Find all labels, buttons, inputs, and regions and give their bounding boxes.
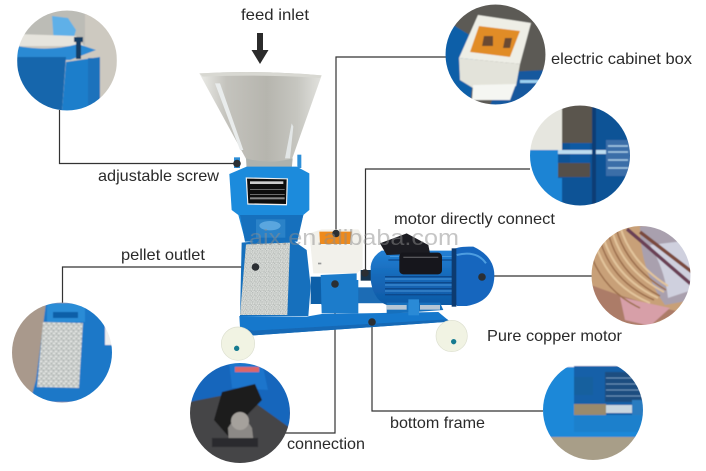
label: adjustable screw: adjustable screw <box>98 168 220 185</box>
detail circle: connection <box>189 362 291 464</box>
detail circle: pure copper <box>591 225 692 330</box>
leader line: connection <box>285 284 335 433</box>
hopper <box>199 72 322 169</box>
label: electric cabinet box: electric cabinet box <box>551 51 692 68</box>
label: bottom frame: bottom frame <box>390 415 485 432</box>
leader line: adjustable screw <box>60 110 237 164</box>
leader line: pure copper motor <box>482 275 592 277</box>
label: connection: connection <box>287 436 365 453</box>
icon: feed arrow <box>252 33 268 64</box>
electric motor <box>361 233 494 315</box>
label: pure copper motor: Pure copper motor <box>487 328 622 345</box>
leader line: pellet outlet <box>62 267 255 303</box>
galvanized outlet chute <box>240 243 290 315</box>
gearbox body <box>240 238 311 316</box>
label: motor directly connect: motor directly connect <box>394 211 556 228</box>
detail circle: pellet outlet <box>11 302 113 404</box>
nameplate <box>246 177 288 205</box>
feed head <box>229 155 309 242</box>
leader line: electric cabinet box <box>336 57 446 233</box>
label: feed inlet: feed inlet <box>241 7 310 24</box>
wheels <box>221 320 467 360</box>
connector dots <box>233 160 486 326</box>
machine: pellet mill with motor <box>199 72 494 360</box>
detail circle: electric cabinet <box>445 4 546 105</box>
leader line: bottom frame <box>372 322 543 411</box>
detail circle: adjustable screw <box>17 10 117 111</box>
detail circle: bottom frame <box>542 359 644 462</box>
label: pellet outlet: pellet outlet <box>121 247 206 264</box>
watermark: aix.en.alibaba.com <box>249 225 459 250</box>
leader line: motor directly connect <box>366 169 530 273</box>
electric cabinet <box>309 229 363 273</box>
detail circle: motor coupling <box>529 105 631 207</box>
bottom frame and coupling stand <box>239 273 450 335</box>
